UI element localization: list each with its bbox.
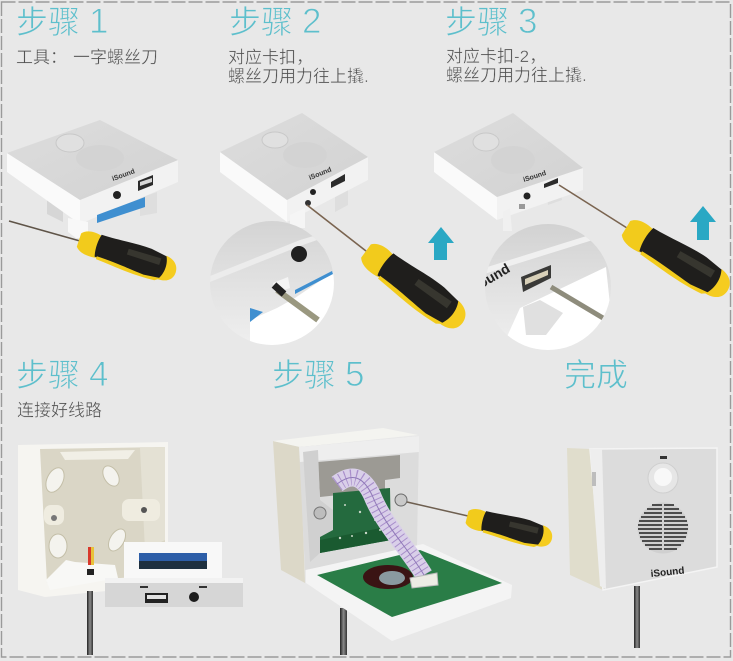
inset: step 3 detail circle: iSound <box>464 260 513 298</box>
text: step 4 instruction: 连接好线路 <box>17 401 102 420</box>
heading: step 1: 步骤 1 <box>16 2 108 41</box>
finished speaker unit <box>567 448 717 590</box>
screwdriver: step 3 <box>559 185 733 305</box>
arrow: step 2 up <box>428 227 454 260</box>
device: step 1 speaker module: iSound <box>111 168 136 183</box>
back box: step 5 open unit <box>273 428 419 583</box>
heading: step 3: 步骤 3 <box>445 2 537 41</box>
heading: finished: 完成 <box>564 357 628 393</box>
screwdriver: step 5 <box>407 502 555 551</box>
finished speaker unit: iSound <box>650 566 685 580</box>
text: step 3 instruction: 对应卡扣-2， <box>446 47 546 66</box>
cable: step 5 <box>340 608 347 655</box>
module: step 4 terminal base <box>105 542 243 607</box>
heading: step 2: 步骤 2 <box>229 2 321 41</box>
cover: step 5 circuit board <box>306 544 512 641</box>
device: step 2 speaker module <box>220 113 368 228</box>
text: step 1 tool: 工具： <box>16 48 67 67</box>
heading: step 5: 步骤 5 <box>272 355 364 394</box>
cable: step 4 <box>87 591 93 655</box>
cable: finished unit <box>634 586 640 648</box>
text: step 3 instruction: 螺丝刀用力往上撬. <box>446 66 587 85</box>
inset: step 3 detail circle <box>485 224 610 350</box>
ribbon cable: step 5 <box>337 478 438 588</box>
heading: step 4: 步骤 4 <box>16 355 108 394</box>
screwdriver: step 2 <box>307 205 473 337</box>
wires: step 4 coloured leads <box>87 547 94 575</box>
text: step 1 tool: 一字螺丝刀 <box>73 48 158 67</box>
text: step 2 instruction: 螺丝刀用力往上撬. <box>228 67 369 86</box>
device: step 3 speaker module: iSound <box>522 170 547 184</box>
device: step 1 speaker module <box>7 120 178 238</box>
device: step 3 speaker module <box>434 113 583 231</box>
inset: step 2 detail circle <box>211 221 334 345</box>
back box: step 4 mounting box <box>18 442 168 597</box>
arrow: step 3 up <box>690 206 716 240</box>
device: step 2 speaker module: iSound <box>308 166 333 182</box>
text: step 2 instruction: 对应卡扣， <box>228 48 313 67</box>
screwdriver: step 1 <box>9 221 180 286</box>
